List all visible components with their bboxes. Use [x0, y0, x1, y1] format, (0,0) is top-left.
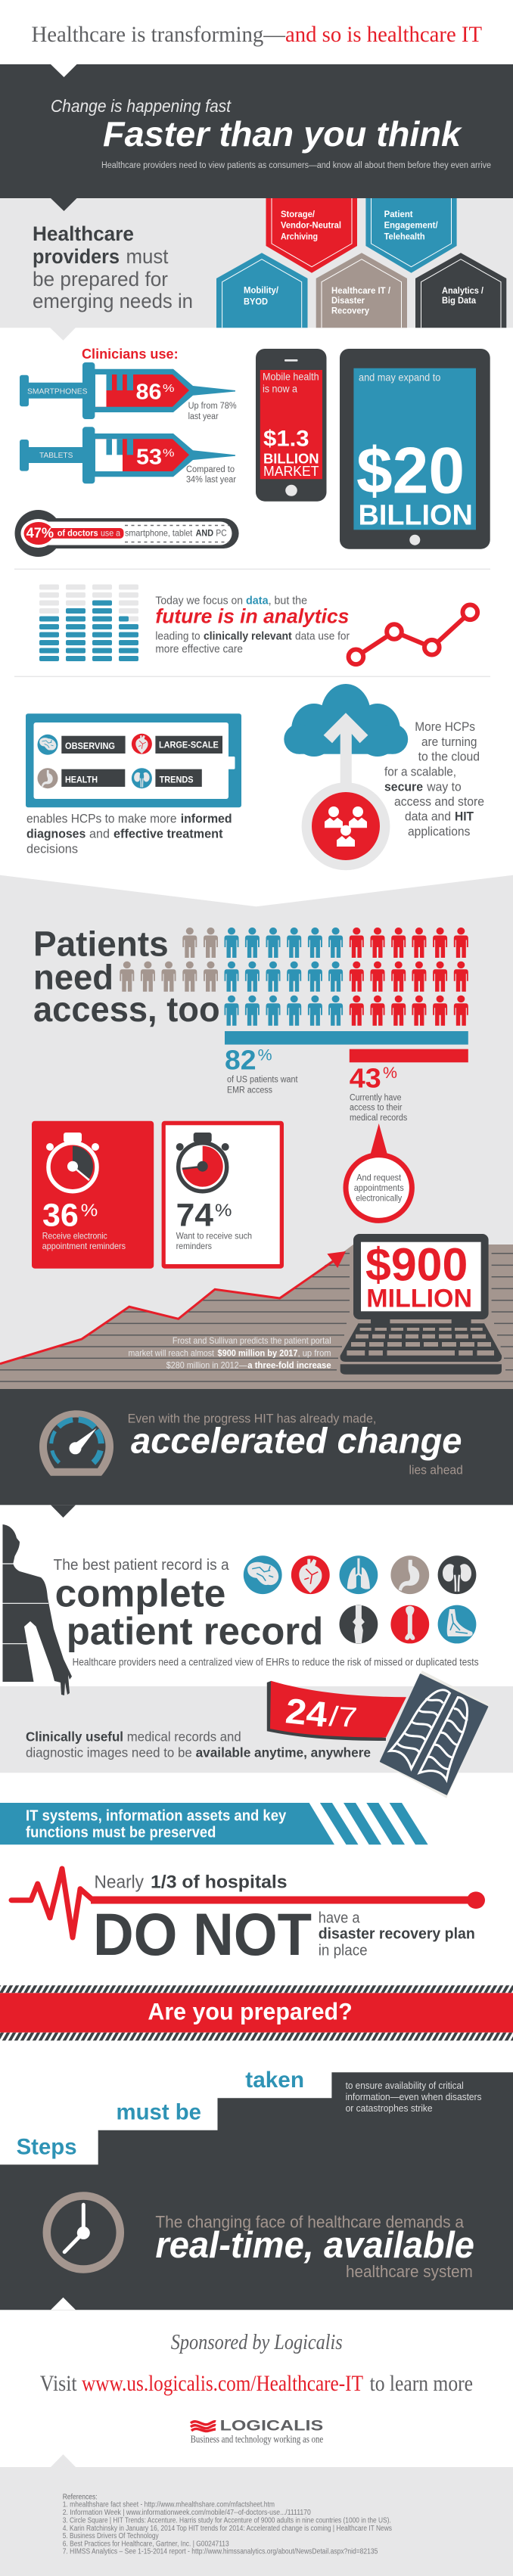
panel: accelerated change banner: [0, 1389, 513, 1518]
text: ensure availability: information—even when disasters: [346, 2092, 481, 2102]
text: turning to the cloud: access and store: [394, 794, 484, 809]
ribbon: 24/7: /7: [328, 1701, 359, 1733]
text: visit url: to learn more: [370, 2371, 473, 2396]
panel: references: 6. Best Practices for Healthcare, Gartner, Inc. | G00247113: [63, 2540, 229, 2548]
heading: healthcare providers must be prepared: be prepared for: [33, 268, 168, 291]
chart: patient portal market growth: a three-fold increase: [247, 1359, 331, 1370]
syringe chart: tablets 53%: 34% last year: [186, 475, 236, 484]
icon: bone: [390, 1605, 429, 1643]
syringe chart: smartphones 86%: Up from 78%: [188, 402, 237, 411]
heading: patients need access, too: access, too: [33, 990, 220, 1029]
label: observing: OBSERVING: [65, 741, 115, 751]
hexagon: storage: [266, 193, 357, 273]
hexagon: disaster recovery: Healthcare IT /: [331, 287, 391, 296]
text: available anytime, anywhere: diagnostic images need to be: [26, 1745, 192, 1760]
chart: patient portal market growth: Frost and Sullivan predicts the patient portal: [173, 1335, 331, 1346]
stat: 82%: [225, 1031, 468, 1095]
stat: 82%: EMR access: [227, 1086, 272, 1095]
text: available anytime, anywhere: medical records and: [127, 1729, 241, 1745]
label: health: [61, 769, 125, 787]
chart: patient portal market growth: $280 million in 2012—: [166, 1359, 247, 1370]
heading: healthcare providers must be prepared: [33, 222, 193, 312]
icon: brain: [38, 735, 58, 755]
card: 36% receive reminders: appointment reminders: [42, 1241, 126, 1251]
phone: $1.3 billion market: MARKET: [263, 464, 319, 479]
tablet: $20 billion: and may expand to: [359, 371, 441, 383]
hexagon: analytics: Analytics /: [442, 287, 484, 296]
syringe chart: smartphones 86%: 86: [136, 381, 162, 405]
text: future is in analytics: more effective care: [155, 642, 243, 655]
panel: faster than you think banner: Faster than you think: [103, 114, 462, 154]
text: turning to the cloud: applications: [408, 824, 470, 838]
phone: $1.3 billion market: $1.3: [263, 426, 309, 451]
chart: patient portal market growth: , up from: [298, 1347, 331, 1358]
text: available anytime, anywhere: available anytime, anywhere: [196, 1745, 371, 1760]
title: and so is healthcare IT: [285, 22, 482, 47]
panel: patients need access: [0, 875, 513, 1389]
icon: stopwatch: [46, 1133, 99, 1192]
phone: $1.3 billion market: Mobile health: [263, 370, 319, 382]
stat: 43%: [350, 1049, 468, 1123]
icon row: organs and bones: [244, 1555, 476, 1643]
text: informed diagnoses: decisions: [26, 841, 78, 856]
icon: cloud with upload arrow and people: [284, 684, 408, 870]
panel: references: 2. Information Week | www.informationweek.com/mobile/47--of-doctors-use.../1111170: [63, 2509, 311, 2517]
heading: patients need access, too: need: [33, 957, 113, 996]
panel: observing large-scale health trends: [26, 713, 241, 807]
label: observing: [61, 736, 126, 754]
syringe chart: smartphones 86%: [20, 362, 237, 421]
hexagon: mobility: Mobility/: [244, 287, 279, 296]
text: informed diagnoses: diagnoses: [26, 827, 86, 841]
stat: 43%: Currently have: [350, 1093, 401, 1102]
syringe chart: tablets 53%: 53: [136, 445, 162, 469]
icon: kidneys: [438, 1555, 476, 1594]
card: 74% want reminders: [162, 1121, 284, 1269]
card: 74% want reminders: Want to receive such: [176, 1230, 252, 1241]
phone: $1.3 billion market: [256, 349, 327, 502]
icon: lungs: [339, 1555, 378, 1594]
text: real-time, available: The changing face of healthcare demands a: [155, 2212, 464, 2231]
syringe chart: smartphones 86%: last year: [188, 412, 219, 421]
text: available anytime, anywhere: [26, 1729, 371, 1760]
title: Healthcare is transforming—: [32, 22, 286, 47]
heading: healthcare providers must be prepared: must: [126, 245, 169, 268]
text: informed diagnoses: informed: [181, 812, 232, 826]
thermometer: 47% of doctors: 47%: [26, 526, 54, 541]
callout: request appointments electronically: And request: [356, 1173, 402, 1183]
panel: references: 1. mhealthshare fact sheet - http://www.mhealthshare.com/mfactsheet.htm: [63, 2501, 275, 2509]
text: turning to the cloud: HIT: [455, 809, 474, 824]
text: future is in analytics: clinically relevant: [204, 629, 292, 642]
text: turning to the cloud: [384, 719, 484, 838]
icon: ECG pulse line: [11, 1869, 485, 1937]
text: informed diagnoses: effective treatment: [113, 827, 223, 841]
stat: 82%: %: [258, 1047, 272, 1064]
icon: body silhouette: [3, 1524, 72, 1695]
syringe chart: tablets 53%: Compared to: [186, 465, 235, 474]
heading: healthcare providers must be prepared: Healthcare: [33, 222, 134, 245]
hexagon: patient engagement: Patient: [384, 210, 413, 219]
hexagon: patient engagement: Telehealth: [384, 233, 425, 242]
panel: faster than you think banner: [0, 64, 513, 211]
icon: stomach: [390, 1555, 429, 1594]
syringe chart: smartphones 86%: %: [163, 382, 174, 395]
panel: 24/7 gray band: [0, 1686, 513, 1773]
panel: steps staircase: [0, 2068, 513, 2310]
heading: steps must be taken: taken: [245, 2068, 304, 2093]
syringe chart: tablets 53%: [20, 427, 236, 484]
phone: $1.3 billion market: is now a: [263, 382, 297, 394]
hexagon: mobility: BYOD: [244, 298, 268, 307]
thermometer: 47% of doctors: PC: [216, 528, 227, 539]
stat: 43%: access to their: [350, 1104, 403, 1113]
hexagon: disaster recovery: Recovery: [331, 307, 370, 316]
stat: 1/3 of hospitals do not: disaster recovery plan: [319, 1926, 475, 1943]
chart: patient portal market growth: [0, 1244, 513, 1389]
card: 74% want reminders: reminders: [176, 1241, 212, 1251]
ribbon: 24/7: 24: [284, 1690, 329, 1735]
text: informed diagnoses: enables HCPs to make more: [26, 812, 177, 826]
heading: complete patient record: patient record: [67, 1609, 323, 1652]
callout: request appointments electronically: appointments: [354, 1182, 404, 1193]
text: turning to the cloud: are turning: [421, 735, 477, 749]
text: future is in analytics: future is in analytics: [155, 604, 349, 627]
heading: complete patient record: [53, 1557, 479, 1668]
text: turning to the cloud: data and: [405, 809, 451, 824]
icon: heart: [132, 734, 152, 754]
text: turning to the cloud: for a scalable,: [384, 765, 456, 779]
heading: steps must be taken: must be: [117, 2100, 201, 2125]
heading: complete patient record: complete: [55, 1571, 225, 1614]
hexagon: patient engagement: [365, 193, 457, 273]
icon: knee: [339, 1605, 378, 1643]
hexagon: analytics: [415, 253, 506, 328]
panel: faster than you think banner: Healthcare providers need to view patients as consumers—and know all about them before they even arrive: [101, 161, 491, 170]
thermometer: 47% of doctors: AND: [196, 528, 213, 539]
label: health: HEALTH: [65, 775, 98, 785]
line chart: analytics trend: [349, 605, 477, 664]
icon: speedometer: [39, 1410, 113, 1476]
chart: patient portal market growth: $900 million by 2017: [218, 1347, 298, 1358]
label: trends: [155, 769, 202, 787]
hexagon: storage: Archiving: [281, 233, 318, 242]
thermometer: 47% of doctors: smartphone, tablet: [125, 528, 193, 539]
icon: heart: [291, 1555, 330, 1594]
icon: kidneys: [132, 768, 152, 788]
text: real-time, available: real-time, available: [155, 2225, 474, 2266]
thermometer: 47% of doctors: [15, 510, 239, 557]
heading: healthcare providers must be prepared: emerging needs in: [33, 290, 193, 312]
text: visit url: Visit: [40, 2371, 77, 2396]
syringe chart: tablets 53%: TABLETS: [39, 451, 73, 460]
tablet: $20 billion: BILLION: [359, 499, 473, 531]
banner: IT systems must be preserved: [0, 1803, 428, 1844]
text: future is in analytics: Today we focus on: [155, 594, 243, 607]
panel: accelerated change banner: lies ahead: [409, 1463, 463, 1477]
text: future is in analytics: data use for: [295, 629, 350, 642]
icon: laptop $900 million: $900: [365, 1239, 468, 1291]
text: informed diagnoses: [26, 812, 232, 856]
stat: 1/3 of hospitals do not: have a: [319, 1910, 360, 1927]
heading: clinicians use: Clinicians use:: [82, 346, 179, 362]
hexagon: disaster recovery: Disaster: [331, 297, 365, 306]
heading: patients need access, too: Patients: [33, 924, 169, 963]
panel: faster than you think banner: Change is happening fast: [51, 96, 232, 116]
text: future is in analytics: data: [246, 594, 269, 607]
hexagon: storage: Vendor-Neutral: [281, 222, 341, 231]
panel: emerging needs: [0, 193, 513, 340]
heading: complete patient record: The best patient record is a: [53, 1557, 230, 1574]
stat: 1/3 of hospitals do not: in place: [319, 1942, 368, 1959]
callout: request appointments electronically: [346, 1123, 412, 1220]
icon: chest x-ray: [380, 1670, 489, 1798]
hexagon: mobility: [216, 253, 307, 328]
stat: 1/3 of hospitals do not: Nearly: [94, 1872, 144, 1893]
stat: 43%: %: [383, 1064, 397, 1082]
stat: 1/3 of hospitals do not: 1/3 of hospitals: [151, 1872, 288, 1893]
banner: IT systems must be preserved: IT systems, information assets and key: [26, 1808, 287, 1825]
label: large-scale: LARGE-SCALE: [159, 739, 219, 750]
text: future is in analytics: leading to: [155, 629, 201, 642]
panel: accelerated change banner: accelerated change: [131, 1421, 462, 1461]
text: ensure availability: to ensure availability of critical: [346, 2080, 464, 2091]
text: future is in analytics: , but the: [269, 594, 307, 607]
heading: steps must be taken: Steps: [17, 2134, 77, 2159]
banner: are you prepared: Are you prepared?: [148, 1997, 353, 2024]
card: 74% want reminders: %: [215, 1200, 232, 1220]
icon: laptop $900 million: MILLION: [366, 1285, 472, 1313]
phone: $1.3 billion market: BILLION: [263, 451, 319, 467]
stat: 1/3 of hospitals do not: [93, 1872, 475, 1968]
text: turning to the cloud: More HCPs: [415, 719, 475, 734]
pictogram: patient icons: [120, 928, 468, 1026]
panel: references: [0, 2454, 513, 2576]
hexagon: patient engagement: Engagement/: [384, 222, 438, 231]
heading: steps must be taken: [17, 2068, 304, 2159]
text: available anytime, anywhere: Clinically useful: [26, 1729, 123, 1745]
icon: clock: [47, 2195, 120, 2270]
text: real-time, available: healthcare system: [346, 2262, 473, 2281]
ribbon: 24/7: [267, 1681, 406, 1741]
heading: healthcare providers must be prepared: providers: [33, 245, 120, 268]
hexagon: disaster recovery: [316, 253, 407, 328]
text: visit url: www.us.logicalis.com/Healthcare-IT: [82, 2371, 363, 2396]
card: 74% want reminders: 74: [176, 1198, 213, 1234]
card: 36% receive reminders: [32, 1121, 154, 1269]
panel: references: 5. Business Drivers Of Technology: [63, 2532, 159, 2540]
chart: patient portal market growth: market will reach almost: [129, 1347, 215, 1358]
tablet: $20 billion: $20: [356, 435, 465, 508]
panel: accelerated change banner: Even with the progress HIT has already made,: [128, 1412, 376, 1426]
tablet: $20 billion: [340, 349, 490, 549]
stat: 82%: 82: [225, 1044, 256, 1075]
icon: foot: [438, 1605, 476, 1643]
text: turning to the cloud: way to: [426, 779, 462, 794]
hexagon: analytics: Big Data: [442, 297, 477, 306]
syringe chart: smartphones 86%: SMARTPHONES: [27, 387, 88, 396]
label: trends: TRENDS: [160, 775, 194, 785]
logo: logicalis: Business and technology working as one: [191, 2433, 323, 2444]
text: turning to the cloud: secure: [384, 779, 423, 794]
panel: references: 7. HIMSS Analytics – See 1-15-2014 report - http://www.himssanalytics.org/about/NewsDetail.aspx?nid=82135: [63, 2548, 378, 2556]
text: future is in analytics: [155, 594, 350, 655]
text: sponsored by logicalis: Sponsored by Logicalis: [171, 2331, 343, 2354]
stat: 43%: medical records: [350, 1114, 408, 1123]
banner: are you prepared: [0, 1985, 513, 2040]
label: large-scale: [155, 736, 222, 754]
panel: references: References:: [63, 2493, 98, 2501]
icon: brain: [244, 1555, 282, 1594]
icon: laptop $900 million: [340, 1234, 502, 1375]
stat: 82%: of US patients want: [227, 1076, 298, 1085]
logo: logicalis: [191, 2418, 323, 2444]
banner: IT systems must be preserved: functions must be preserved: [26, 1824, 216, 1841]
stat: 43%: 43: [350, 1062, 381, 1093]
thermometer: 47% of doctors: use a: [101, 528, 120, 539]
callout: request appointments electronically: electronically: [356, 1192, 402, 1203]
heading: patients need access, too: [33, 924, 220, 1029]
text: ensure availability: or catastrophes strike: [346, 2103, 433, 2114]
icon: stopwatch: [176, 1133, 229, 1192]
stat: 1/3 of hospitals do not: DO NOT: [93, 1900, 312, 1968]
bar chart: data columns: [39, 584, 138, 661]
title: [32, 22, 482, 47]
icon: stomach: [38, 768, 58, 788]
text: turning to the cloud: to the cloud: [418, 750, 480, 764]
card: 36% receive reminders: Receive electronic: [42, 1230, 107, 1241]
hexagon: storage: Storage/: [281, 210, 316, 219]
panel: references: 3. Circle Square | HIT Trends: Accenture. Harris study for Accenture of 9000 adults in nine countries (1000 in the US).: [63, 2516, 391, 2525]
text: ensure availability: [346, 2080, 481, 2114]
card: 36% receive reminders: %: [81, 1200, 98, 1220]
syringe chart: tablets 53%: %: [163, 446, 174, 459]
text: real-time, available: [155, 2212, 474, 2281]
card: 36% receive reminders: 36: [42, 1198, 79, 1234]
logo: logicalis: LOGICALIS: [220, 2418, 323, 2434]
text: informed diagnoses: and: [89, 827, 110, 841]
panel: references: 4. Karin Ratchinsky in January 16, 2014 Top HIT trends for 2014: Accelerated change is coming | Healthcare IT News: [63, 2525, 392, 2533]
thermometer: 47% of doctors: of doctors: [58, 528, 98, 539]
